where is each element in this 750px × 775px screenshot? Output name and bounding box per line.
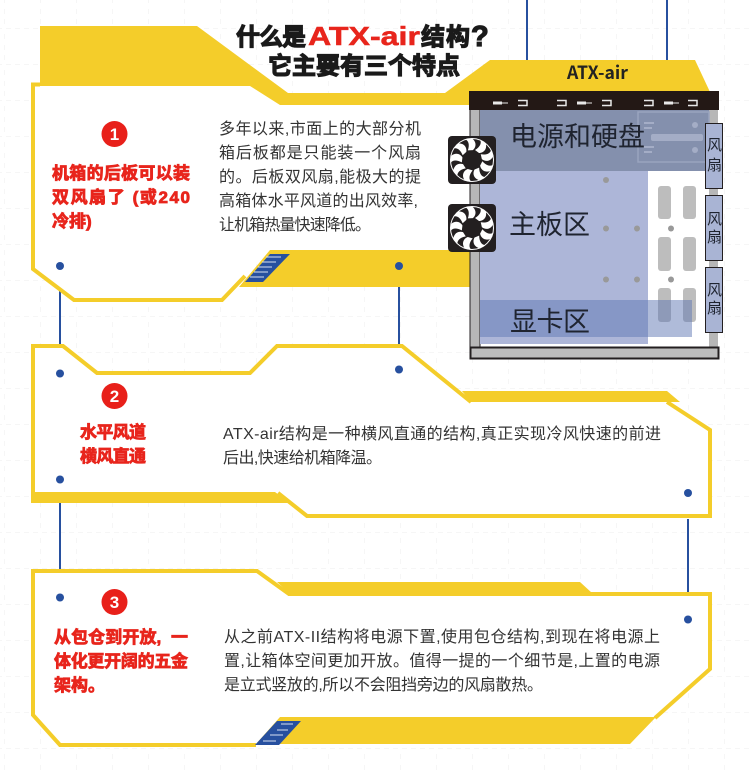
heading 1: 机箱的后板可以装 (52, 164, 190, 183)
drive slots (658, 186, 696, 322)
number badge 2: 2 (110, 387, 119, 406)
rivets (56, 262, 403, 270)
zone: motherboard (480, 171, 648, 344)
heading 3: 体化更开阔的五金 (54, 651, 188, 671)
heading 3 (54, 627, 188, 695)
heading 2: 水平风道 (80, 422, 146, 442)
panel outline (33, 571, 710, 745)
body text 3: 是立式竖放的,所以不会阻挡旁边的风扇散热。 (224, 676, 543, 694)
fan: rear bottom (447, 203, 496, 252)
case left post (470, 108, 480, 348)
title: 什么是 (236, 24, 306, 51)
fan: top panel 2: 扇 (707, 229, 722, 246)
label: ATX-air: ATX-air (566, 59, 628, 85)
rivets (56, 594, 692, 624)
panel background (33, 571, 710, 745)
heading 1: 双风扇了 (或240 (52, 187, 190, 207)
yellow footer block (256, 717, 656, 744)
panel: feature 2 (31, 346, 710, 516)
panel outline (33, 346, 710, 516)
body text 1: 箱后板都是只能装一个风扇 (219, 144, 421, 162)
case interior (470, 92, 718, 358)
body text 1: 多年以来,市面上的大部分机 (219, 120, 421, 138)
body text 1: 的。后板双风扇,能极大的提 (219, 168, 421, 186)
number badge 2 (102, 383, 128, 409)
panel background (33, 85, 470, 300)
fan: top panel 3: 扇 (707, 300, 722, 317)
body text 1: 高箱体水平风道的出风效率, (219, 192, 418, 210)
rivets (56, 366, 692, 497)
title: ? (471, 21, 489, 53)
title: ATX-air (308, 21, 420, 51)
standoffs (603, 177, 674, 282)
heading 1 (52, 164, 190, 231)
title: 结构 (421, 24, 470, 51)
body text 1 (219, 120, 421, 234)
zone: power and drives (480, 110, 709, 171)
heading 3: 架构。 (54, 676, 105, 695)
connector lines between panels (60, 0, 688, 593)
fan: top panel 2: 风 (707, 211, 722, 228)
panel: feature 1 (33, 26, 710, 300)
zone: graphics card: 显卡区 (510, 307, 590, 337)
yellow bottom strip (31, 492, 290, 503)
fan: top panel 2 (706, 196, 722, 260)
heading 1: 冷排) (52, 211, 92, 231)
panel outline (33, 84, 245, 300)
zone: power and drives: 电源和硬盘 (510, 122, 645, 152)
case top bar with connectors (469, 91, 719, 110)
fan: top panel 1: 风 (707, 137, 722, 154)
number badge 1: 1 (110, 125, 119, 144)
yellow header block (40, 26, 710, 120)
body text 2: 后出,快速给机箱降温。 (223, 449, 382, 467)
fan: rear top (447, 135, 496, 184)
number badge 3 (102, 589, 128, 615)
yellow top strip (277, 582, 592, 593)
body text 2: ATX-air结构是一种横风直通的结构,真正实现冷风快速的前进 (223, 425, 661, 443)
zone: motherboard: 主板区 (509, 210, 590, 240)
heading 3: 从包仓到开放, 一 (54, 627, 188, 647)
body text 3: 从之前ATX-II结构将电源下置,使用包仓结构,到现在将电源上 (224, 628, 660, 646)
heading 2 (80, 422, 146, 466)
number badge 1 (102, 121, 128, 147)
body text 2 (223, 425, 661, 467)
title (236, 21, 489, 80)
fan: top panel 1 (706, 124, 722, 188)
hatched stripe (245, 254, 290, 282)
heading 2: 横风直通 (80, 446, 146, 466)
panel: feature 3 (33, 571, 710, 745)
body text 3: 置,让箱体空间更加开放。值得一提的一个细节是,上置的电源 (224, 652, 660, 670)
fan: top panel 3: 风 (707, 282, 722, 299)
number badge 3: 3 (110, 593, 119, 612)
panel background (33, 346, 710, 516)
zone: graphics card (480, 300, 692, 337)
case right post (709, 108, 718, 348)
body text 1: 让机箱热量快速降低。 (219, 216, 371, 234)
yellow top strip (462, 391, 680, 402)
fan: top panel 1: 扇 (707, 157, 722, 174)
title: 它主要有三个特点 (268, 53, 460, 80)
fan: top panel 3 (706, 268, 722, 332)
body text 3 (224, 628, 660, 694)
case bottom rail (470, 348, 718, 358)
diagram: ATX-air case (447, 91, 722, 358)
yellow footer block (239, 250, 480, 287)
hatched stripe (255, 721, 301, 745)
